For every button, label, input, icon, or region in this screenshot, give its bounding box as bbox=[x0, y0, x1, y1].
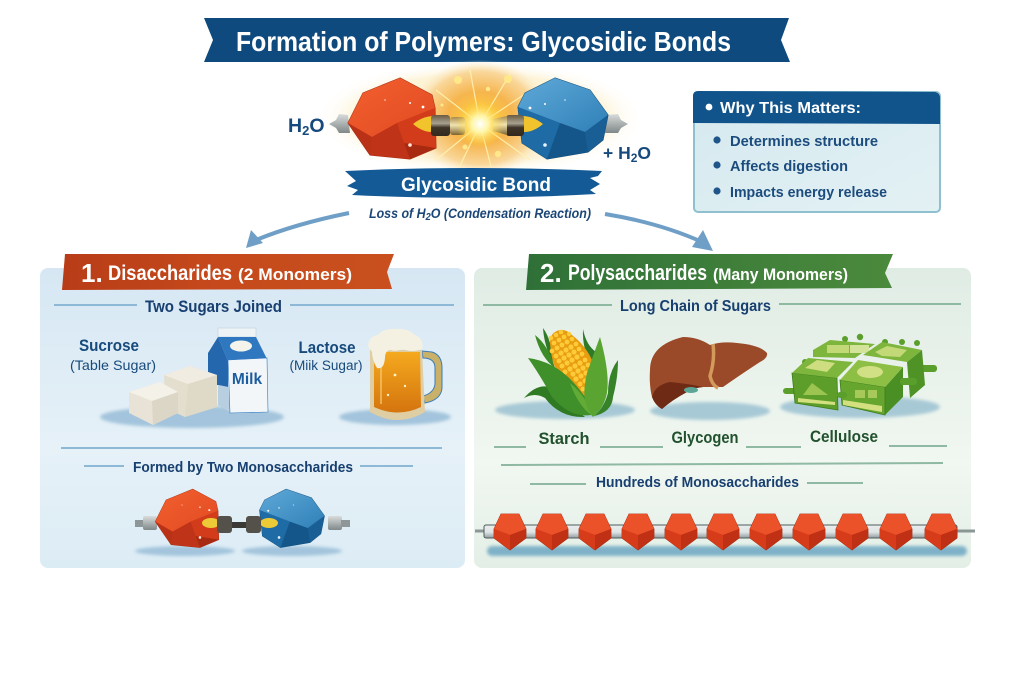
panel: polysaccharides bbox=[474, 254, 975, 568]
icon: sugar cubes bbox=[129, 366, 217, 425]
subheading: two sugars joined: Two Sugars Joined bbox=[145, 298, 282, 316]
title banner bbox=[204, 18, 790, 62]
polysaccharide chain bbox=[475, 514, 975, 556]
reaction glow bbox=[408, 60, 552, 176]
carton label: Milk bbox=[232, 371, 262, 388]
glycosidic bond text: Glycosidic Bond bbox=[401, 174, 551, 196]
panel: why this matters bbox=[693, 91, 940, 212]
sucrose label bbox=[70, 336, 156, 373]
sucrose label: Sucrose bbox=[79, 336, 139, 355]
subheading: hundreds of monosaccharides: Hundreds of Monosaccharides bbox=[596, 475, 799, 491]
lactose label: (Miik Sugar) bbox=[290, 358, 362, 373]
label: plus H2O right: 2 bbox=[631, 151, 638, 165]
banner qualifier: (2 Monomers) bbox=[238, 265, 352, 284]
label: H2O left: O bbox=[309, 115, 324, 137]
banner title: Disaccharides bbox=[108, 261, 232, 285]
banner title: Polysaccharides bbox=[568, 260, 707, 285]
arrow: to disaccharides bbox=[246, 213, 349, 248]
card heading: Why This Matters: bbox=[720, 100, 861, 117]
label: cellulose: Cellulose bbox=[810, 427, 878, 446]
condensation caption: 2 bbox=[425, 212, 431, 223]
label: glycogen: Glycogen bbox=[672, 428, 738, 447]
list item: energy: Impacts energy release bbox=[730, 184, 887, 201]
icon: corn bbox=[524, 328, 618, 417]
spark dots bbox=[440, 75, 512, 157]
label: H2O left: 2 bbox=[302, 123, 309, 138]
mug foam bbox=[368, 329, 422, 368]
pale halo bbox=[315, 60, 645, 176]
label: plus H2O right: O bbox=[637, 143, 651, 163]
heading bullet bbox=[706, 104, 712, 110]
disaccharides banner bbox=[62, 254, 394, 290]
list item: digestion: Affects digestion bbox=[730, 158, 848, 175]
panel: disaccharides bbox=[40, 254, 465, 568]
icon: beer mug bbox=[368, 329, 442, 420]
burst rays bbox=[436, 70, 530, 170]
icon: linked monomer pair bbox=[135, 489, 350, 556]
lactose label bbox=[290, 338, 362, 373]
icon: milk carton bbox=[208, 328, 268, 413]
banner qualifier: (Many Monomers) bbox=[713, 266, 848, 284]
illustration shadows bbox=[495, 396, 940, 420]
connector stubs and knobs bbox=[783, 334, 937, 394]
icon: liver bbox=[650, 337, 767, 409]
glycosidic bond label bbox=[345, 168, 602, 198]
subheading: formed by two monosaccharides: Formed by Two Monosaccharides bbox=[133, 460, 353, 476]
sucrose label: (Table Sugar) bbox=[70, 357, 156, 373]
icon: beer shadow bbox=[339, 409, 451, 425]
condensation caption: O (Condensation Reaction) bbox=[431, 206, 591, 221]
polysaccharides banner bbox=[526, 254, 893, 290]
list item: structure: Determines structure bbox=[730, 133, 878, 150]
label: starch: Starch bbox=[538, 429, 590, 448]
icon: cellulose blocks bbox=[783, 334, 937, 415]
banner number: 1. bbox=[81, 258, 103, 288]
condensation caption: Loss of H bbox=[369, 206, 431, 221]
title text: Formation of Polymers: Glycosidic Bonds bbox=[236, 26, 731, 57]
banner number: 2. bbox=[540, 258, 562, 288]
red monomer bbox=[329, 78, 465, 159]
subheading: long chain of sugars: Long Chain of Sugars bbox=[620, 298, 771, 315]
label: plus H2O right: + H bbox=[603, 143, 631, 163]
bond reaction illustration bbox=[315, 60, 645, 176]
arrow: to polysaccharides bbox=[605, 214, 713, 251]
icon: sugar shadow bbox=[100, 406, 284, 428]
label: H2O left: H bbox=[288, 115, 302, 137]
card header bbox=[693, 91, 940, 124]
lactose label: Lactose bbox=[298, 338, 356, 357]
burst core bbox=[456, 100, 504, 148]
blue monomer bbox=[493, 78, 628, 159]
